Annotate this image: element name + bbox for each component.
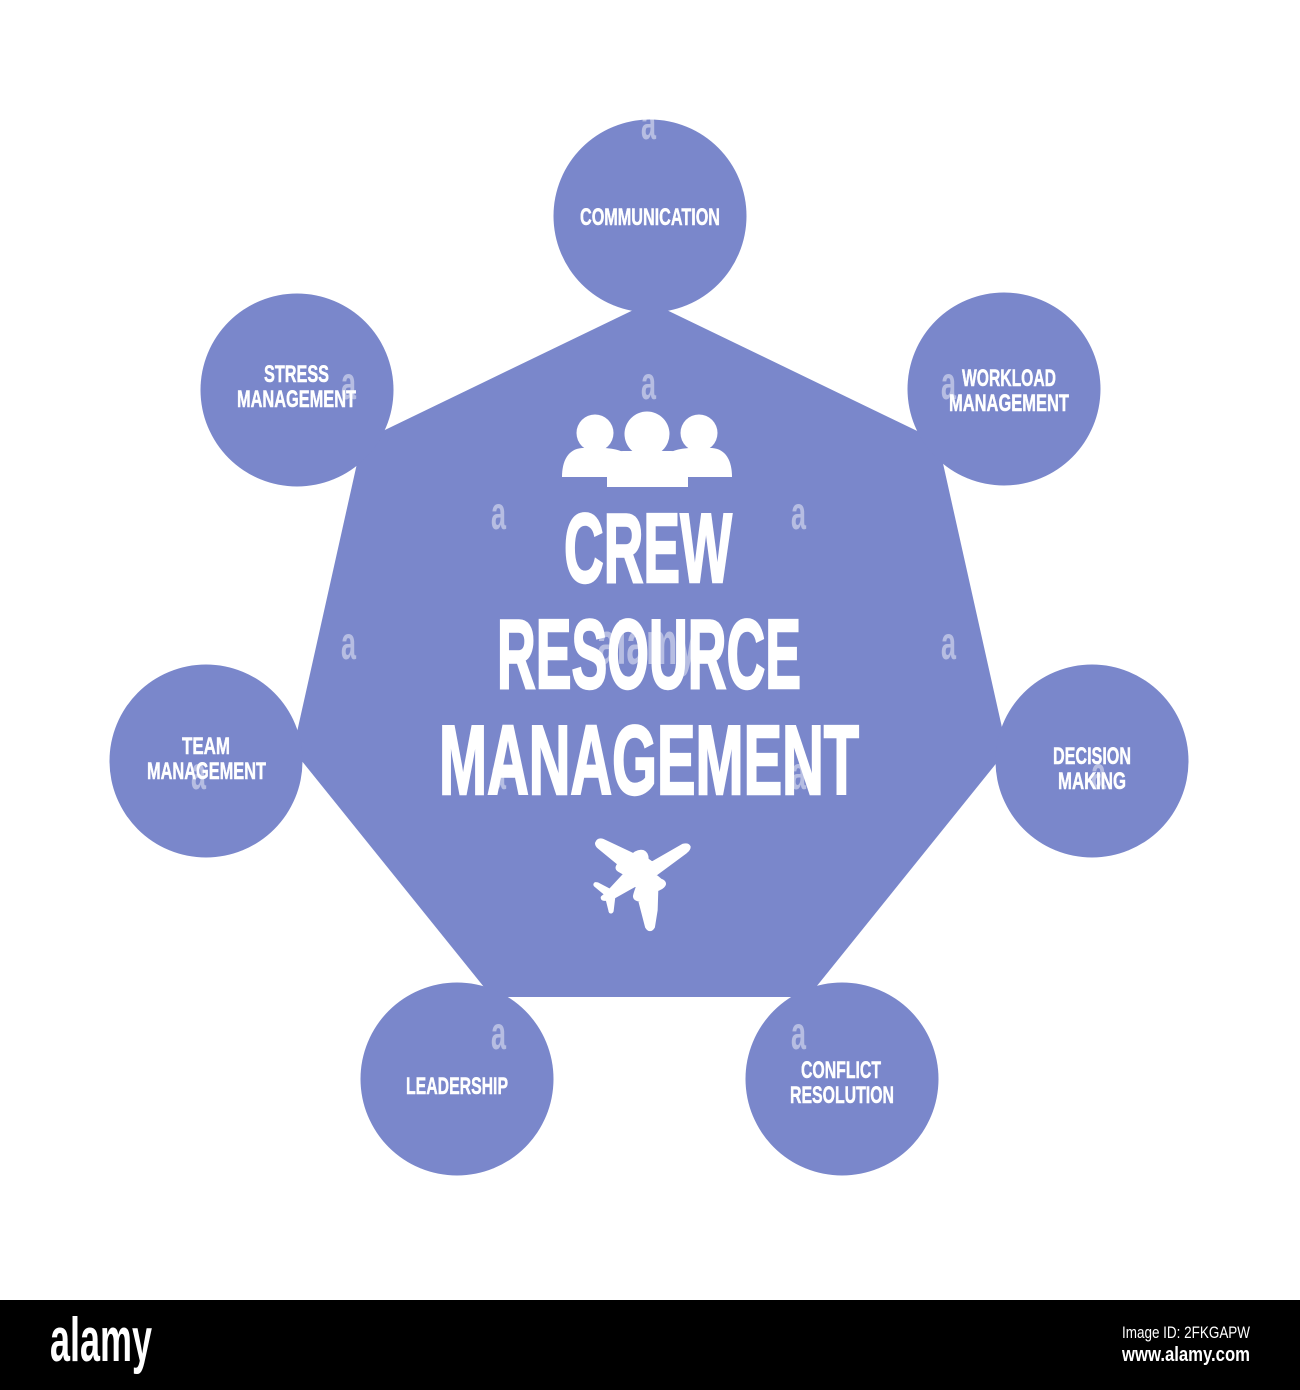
- label: workload management: MANAGEMENT: [949, 390, 1069, 417]
- footer image id: Image ID: 2FKGAPW: [1122, 1323, 1250, 1342]
- watermark marks: [191, 97, 1106, 1059]
- title: [439, 493, 859, 815]
- label: stress management: STRESS: [264, 361, 329, 388]
- label: team management: TEAM: [182, 733, 230, 760]
- panel: central heptagon: [293, 302, 1007, 997]
- label: stress management: [237, 361, 356, 413]
- title: RESOURCE: [497, 599, 801, 709]
- title: MANAGEMENT: [439, 705, 859, 815]
- watermark marks: a: [641, 357, 656, 409]
- circle: decision making: [996, 664, 1188, 858]
- label: decision making: [1053, 743, 1131, 795]
- label: decision making: MAKING: [1058, 768, 1126, 795]
- watermark marks: a: [791, 747, 806, 799]
- label: leadership: LEADERSHIP: [406, 1073, 508, 1100]
- label: team management: MANAGEMENT: [147, 758, 266, 785]
- watermark marks: a: [341, 617, 356, 669]
- label: decision making: DECISION: [1053, 743, 1131, 770]
- circle: communication: [554, 120, 746, 312]
- watermark marks: a: [941, 617, 956, 669]
- label: conflict resolution: RESOLUTION: [790, 1082, 894, 1109]
- circle: leadership: [360, 982, 554, 1176]
- circle: team management: [110, 664, 302, 858]
- icon: crew group: [562, 412, 732, 487]
- watermark marks: a: [341, 357, 356, 409]
- watermark marks: a: [191, 747, 206, 799]
- watermark marks: a: [491, 747, 506, 799]
- circle: workload management: [908, 292, 1100, 486]
- label: workload management: [949, 365, 1069, 417]
- title: CREW: [564, 493, 732, 603]
- watermark marks: a: [791, 1007, 806, 1059]
- label: stress management: MANAGEMENT: [237, 386, 356, 413]
- icon: airplane: [596, 841, 688, 929]
- watermark marks: a: [1091, 747, 1106, 799]
- watermark marks: alamy: [597, 610, 697, 677]
- watermark marks: a: [491, 1007, 506, 1059]
- label: conflict resolution: CONFLICT: [801, 1057, 881, 1084]
- watermark marks: a: [491, 487, 506, 539]
- label: workload management: WORKLOAD: [962, 365, 1056, 392]
- footer url: www.alamy.com: [1121, 1344, 1250, 1366]
- circle: conflict resolution: [746, 982, 938, 1176]
- watermark marks: a: [941, 357, 956, 409]
- label: team management: [147, 733, 266, 785]
- label: conflict resolution: [790, 1057, 894, 1109]
- circle: stress management: [200, 294, 394, 486]
- footer logo: alamy: [50, 1306, 152, 1375]
- watermark marks: a: [791, 487, 806, 539]
- watermark marks: a: [641, 97, 656, 149]
- label: communication: COMMUNICATION: [580, 204, 720, 231]
- footer bar: [0, 1300, 1300, 1390]
